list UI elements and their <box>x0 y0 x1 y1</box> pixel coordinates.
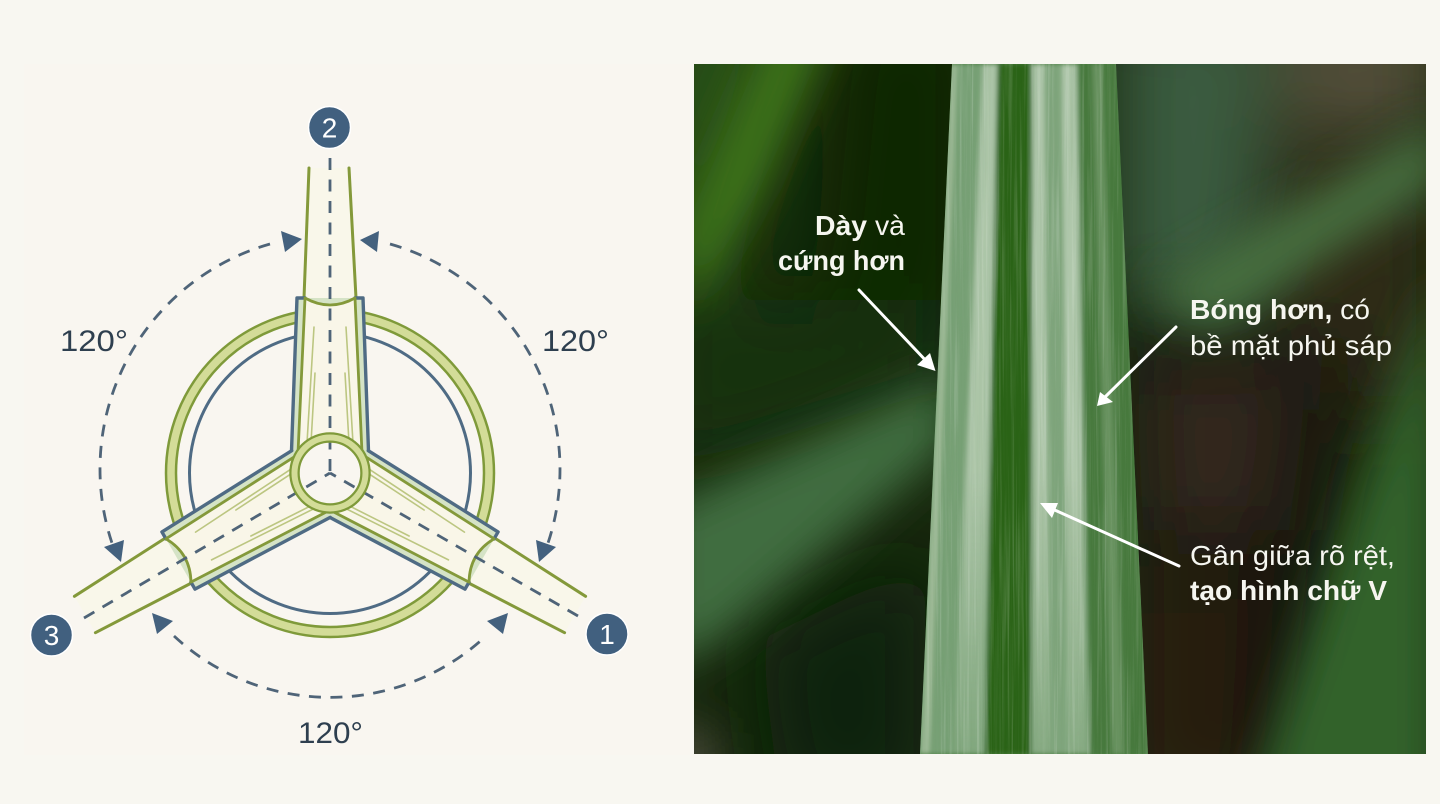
central dark band <box>985 64 1031 754</box>
hub hole <box>298 441 362 505</box>
callout: glossier waxy surface: Bóng hơn, có <box>1190 294 1370 325</box>
fine veins <box>915 64 1155 754</box>
diagram backing sheet <box>24 64 690 755</box>
outer green ring <box>171 314 489 632</box>
number badge 3 <box>30 614 72 656</box>
panel: diagram <box>24 64 690 755</box>
spoke 3: lower left <box>66 440 349 648</box>
callout: thick and stiff <box>778 210 936 371</box>
angle label: bottom: 120° <box>298 717 363 750</box>
right pale band <box>1031 64 1090 754</box>
dashed axis lines <box>84 158 578 618</box>
callout: prominent midrib V shape: tạo hình chữ V <box>1190 575 1387 606</box>
callout: prominent midrib V shape <box>1040 503 1395 606</box>
number badge 1 <box>586 613 628 655</box>
inner blue ring <box>190 332 470 614</box>
callout: glossier waxy surface <box>1097 294 1392 406</box>
dashed arc: upper right 120 degrees <box>360 231 560 562</box>
angle label: right: 120° <box>542 325 609 358</box>
callout: prominent midrib V shape: Gân giữa rõ rệt, <box>1190 540 1395 571</box>
callout: glossier waxy surface: bề mặt phủ sáp <box>1190 330 1392 361</box>
leaf blade <box>915 64 1155 754</box>
number badge 3: 3 <box>44 620 59 651</box>
dashed arc: upper left 120 degrees <box>100 231 302 562</box>
callout: thick and stiff: cứng hơn <box>778 245 905 276</box>
central hub ring <box>294 438 366 508</box>
number badge 1: 1 <box>599 619 615 650</box>
number badge 2 <box>308 106 350 148</box>
dashed arc: bottom 120 degrees <box>152 613 508 697</box>
spoke 2: up <box>292 168 368 473</box>
angle label: left: 120° <box>60 325 128 358</box>
photo base <box>694 64 1426 754</box>
panel: leaf photo <box>694 64 1426 754</box>
outer right band <box>1116 66 1148 753</box>
spoke 1: lower right <box>311 440 594 648</box>
left pale band <box>916 64 998 754</box>
blurred background foliage <box>694 64 1426 754</box>
highlights <box>954 64 997 754</box>
callout: thick and stiff: Dày và <box>815 210 905 241</box>
number badge 2: 2 <box>322 112 337 144</box>
